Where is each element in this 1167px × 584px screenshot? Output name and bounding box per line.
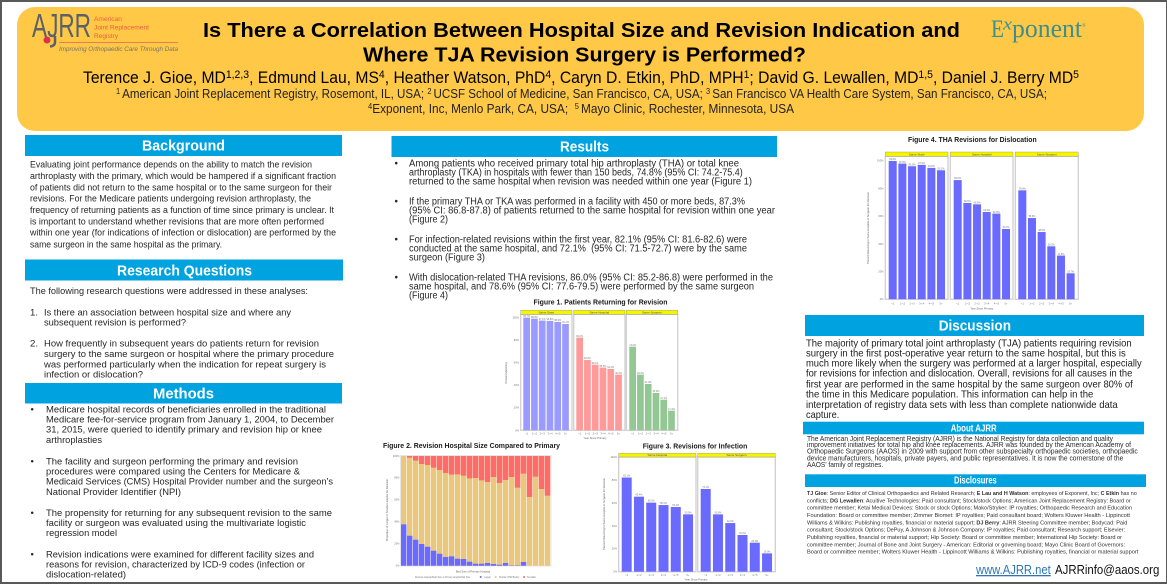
chart: figure 3 revisions for infection: 40% xyxy=(612,524,618,528)
panel: research questions xyxy=(25,260,343,380)
chart: figure 1 patients returning for revision: Year Since Primary xyxy=(584,436,607,440)
chart: figure 1 patients returning for revision: <1 xyxy=(578,432,582,436)
affiliations: 4 xyxy=(368,102,373,111)
text block: background: arthroplasty with the primary, which would be hampered if a significant fraction xyxy=(30,171,336,182)
chart: figure 1 patients returning for revision: 94.1% xyxy=(562,321,570,324)
text block: methods: Medicaid Services (CMS) Hospital Provider number and the surgeon’s xyxy=(46,477,333,488)
text block: background xyxy=(29,160,336,250)
chart: figure 1 patients returning for revision: 5+ xyxy=(564,432,567,436)
chart: figure 1 patients returning for revision: 95.9% xyxy=(554,319,562,322)
chart: figure 1 patients returning for revision: 97.1% xyxy=(539,318,546,321)
text block: disclosures: conflicts; DG Lewallen: Acuitive Technologies: Paid consultant; Stock/stock Options; American Joint Replacement Registry: Board or xyxy=(807,498,1131,504)
chart: figure 1 patients returning for revision: 20% xyxy=(514,406,520,410)
chart: figure 4 THA revisions for dislocation: 2-<3 xyxy=(1039,302,1045,306)
chart: figure 1 patients returning for revision: 17.4% xyxy=(668,408,676,411)
chart: figure 1 patients returning for revision: Same Surgeon xyxy=(642,310,662,314)
chart: figure 4 THA revisions for dislocation: 20% xyxy=(878,270,884,274)
authors: , Daniel J. Berry MD xyxy=(933,69,1073,87)
title: Is There a Correlation Between Hospital Size and Revision Indication and xyxy=(203,19,960,42)
heading: research questions: Research Questions xyxy=(117,263,252,280)
logo: AJRR: Registry xyxy=(94,33,119,40)
chart: figure 3 revisions for infection: 82.1% xyxy=(623,475,631,478)
header banner xyxy=(17,7,1144,131)
affiliations: Mayo Clinic, Rochester, Minnesota, USA xyxy=(581,102,795,116)
text block: disclosures: Board or committee member; Wolters Kluwer Health - Lippincott Williams & Wilkins: Publishing royalties, financial or material support xyxy=(807,550,1139,556)
text block: results: Among patients who received primary total hip arthroplasty (THA) or total knee xyxy=(409,159,740,170)
text block: methods: Medicare fee-for-service program from January 1, 2004, to December xyxy=(46,414,335,425)
text block: background: revisions. For the Medicare patients undergoing revision arthroplasty, the xyxy=(30,194,311,205)
text block: research questions: 2. xyxy=(30,339,38,350)
text block: discussion: The majority of primary total joint arthroplasty (TJA) patients requiring revision xyxy=(806,339,1132,350)
chart: figure 1 patients returning for revision: Figure 1. Patients Returning for Revision xyxy=(534,297,668,306)
chart: figure 3 revisions for infection: 100% xyxy=(610,455,618,459)
chart: figure 2 revision hospital size compared to primary: Smaller xyxy=(527,575,536,579)
text block: methods: • xyxy=(30,550,34,561)
heading: background: Background xyxy=(142,138,225,155)
panel: methods xyxy=(25,383,342,581)
chart: figure 4 THA revisions for dislocation: <1 xyxy=(891,302,895,306)
chart: figure 1 patients returning for revision: 4-<5 xyxy=(661,432,667,436)
heading: results: Results xyxy=(560,139,609,156)
text block: disclosures: Foundation: Board or committee member; Zimmer Biomet: IP royalties; Paid consultant board; Wolters Kluwer Health - Lippincott xyxy=(807,513,1130,519)
text block: about AJRR: AAOS’ family of registries. xyxy=(807,460,883,469)
text block: methods: dislocation-related) xyxy=(46,570,126,581)
chart: figure 3 revisions for infection: 16.0% xyxy=(764,551,771,554)
text block: methods: • xyxy=(30,404,34,415)
text block: methods: The facility and surgeon performing the primary and revision xyxy=(46,456,298,467)
heading: background xyxy=(25,135,342,156)
chart: figure 1 patients returning for revision: 1-<2 xyxy=(638,432,644,436)
chart: figure 1 patients returning for revision: 62.2% xyxy=(584,357,592,360)
affiliations: UCSF School of Medicine, San Francisco, CA, USA; xyxy=(434,87,706,101)
text block: methods xyxy=(30,404,335,581)
chart: figure 2 revision hospital size compared to primary: Larger xyxy=(484,575,491,579)
chart: figure 4 THA revisions for dislocation: 78.6% xyxy=(1019,187,1027,190)
affiliations: San Francisco VA Health Care System, San Francisco, CA, USA; xyxy=(712,87,1047,101)
chart: figure 2 revision hospital size compared to primary xyxy=(383,441,561,579)
heading: disclosures: Disclosures xyxy=(954,476,997,487)
chart: figure 4 THA revisions for dislocation: Percent Returning to Same Hospital or Surgeon for Revision xyxy=(866,192,870,264)
chart: figure 3 revisions for infection: 72.1% xyxy=(702,486,710,489)
chart: figure 2 revision hospital size compared to primary: 20% xyxy=(394,542,400,546)
panel: disclosures xyxy=(805,474,1146,556)
chart: figure 4 THA revisions for dislocation: 100% xyxy=(877,159,884,163)
text block: results: If the primary THA or TKA was performed in a facility with 450 or more beds, 87.3% xyxy=(409,197,745,208)
heading: discussion xyxy=(805,315,1144,336)
chart: figure 4 THA revisions for dislocation: 40% xyxy=(878,242,884,246)
chart: figure 4 THA revisions for dislocation: Figure 4. THA Revisions for Dislocation xyxy=(908,135,1037,144)
chart: figure 4 THA revisions for dislocation: 63.0% xyxy=(983,209,991,212)
chart: figure 1 patients returning for revision: Same State xyxy=(538,310,554,314)
authors: , Caryn D. Etkin, PhD, MPH xyxy=(551,69,744,87)
chart: figure 1 patients returning for revision: 2-<3 xyxy=(646,432,651,436)
chart: figure 4 THA revisions for dislocation: 3-<4 xyxy=(919,302,925,306)
text block: about AJRR xyxy=(807,434,1138,469)
chart: figure 4 THA revisions for dislocation: 69.5% xyxy=(964,200,972,203)
affiliations xyxy=(116,87,1047,116)
chart: figure 1 patients returning for revision: 3-<4 xyxy=(653,432,659,436)
chart: figure 3 revisions for infection: Same Hospital xyxy=(648,453,667,457)
chart: figure 3 revisions for infection: 4-<5 xyxy=(752,573,758,577)
chart: figure 4 THA revisions for dislocation: 97.0% xyxy=(918,162,926,165)
text block: research questions xyxy=(30,286,334,380)
chart: figure 1 patients returning for revision: 58.1% xyxy=(592,362,599,365)
chart: figure 1 patients returning for revision: 2-<3 xyxy=(540,432,545,436)
chart: figure 4 THA revisions for dislocation: 1-<2 xyxy=(965,302,971,306)
chart: figure 3 revisions for infection: 3-<4 xyxy=(661,573,667,577)
logo: AJRR: Joint Replacement xyxy=(94,24,149,32)
chart: figure 4 THA revisions for dislocation: 5+ xyxy=(1069,302,1073,306)
chart: figure 1 patients returning for revision xyxy=(504,297,678,440)
text block: methods: Medicare hospital records of beneficiaries enrolled in the traditional xyxy=(46,404,326,415)
chart: figure 4 THA revisions for dislocation: 96.0% xyxy=(909,163,916,166)
chart: figure 1 patients returning for revision: 33.0% xyxy=(653,390,660,393)
text block: results: surgeon (Figure 3) xyxy=(409,253,485,264)
chart: figure 1 patients returning for revision: 4-<5 xyxy=(555,432,561,436)
chart: figure 3 revisions for infection: 50.0% xyxy=(715,511,722,514)
affiliations: 3 xyxy=(706,87,712,96)
chart: figure 4 THA revisions for dislocation: 4-<5 xyxy=(1058,302,1064,306)
text block: research questions: Is there an association between hospital size and where any xyxy=(44,308,291,319)
text block: discussion xyxy=(806,339,1143,421)
chart: figure 3 revisions for infection: 56.4% xyxy=(672,504,680,507)
text block: discussion: the time in this Medicare population. This information can help in the xyxy=(806,390,1094,401)
chart: figure 2 revision hospital size compared to primary: Proportion of Larger or Smaller Hospital for Revision xyxy=(385,478,389,541)
chart: figure 4 THA revisions for dislocation: 94.8% xyxy=(928,165,936,168)
logo: Exponent: ponent xyxy=(1012,14,1083,43)
chart: figure 2 revision hospital size compared to primary: 80% xyxy=(394,476,400,480)
text block: research questions: How frequently in subsequent years do patients return for revision xyxy=(44,339,319,350)
text block: results: (Figure 2) xyxy=(409,215,448,226)
chart: figure 4 THA revisions for dislocation: 5+ xyxy=(940,302,943,306)
text block: results: • xyxy=(394,197,398,208)
text block: disclosures: consultant; Stock/stock Options; DePuy, A Johnson & Johnson Company: IP royalties; Paid consultant; Research support; Elsevier: xyxy=(807,528,1125,534)
chart: figure 1 patients returning for revision: Same Hospital xyxy=(590,310,609,314)
logo: AJRR: American xyxy=(94,16,122,23)
text block: methods: The propensity for returning for any subsequent revision to the same xyxy=(46,508,332,519)
text block: disclosures: committee member; Ketai Medical Devices: Stock or stock Options; Mako/Stryker: IP royalties; Orthopaedic Research and Education xyxy=(807,506,1132,512)
chart: figure 1 patients returning for revision: 74.0% xyxy=(629,344,637,347)
chart: figure 3 revisions for infection: 0% xyxy=(613,570,618,574)
text block: results: same hospital, and 78.6% (95% CI: 77.6-79.5) were performed by the same surgeon xyxy=(409,281,754,292)
chart: figure 2 revision hospital size compared to primary: Figure 2. Revision Hospital Size Compared to Primary xyxy=(383,441,561,450)
heading: about AJRR xyxy=(803,422,1144,434)
text block: disclosures xyxy=(807,491,1139,556)
footer contact links: www.AJRR.net xyxy=(975,562,1051,577)
text block: disclosures: Publishing royalties, financial or material support; Hip Society: Board or committee member; International Hip Society: Board or xyxy=(807,535,1122,541)
text block: background: within one year (for indications of infection or dislocation) are performed by the xyxy=(29,228,336,239)
text block: methods: 31, 2015, were queried to identify primary and revision hip or knee xyxy=(46,425,322,436)
chart: figure 3 revisions for infection: 50.0% xyxy=(685,511,692,514)
heading: research questions xyxy=(25,260,343,280)
text block: methods: National Provider Identifier (NPI) xyxy=(46,487,181,498)
chart: figure 1 patients returning for revision: 0% xyxy=(515,428,520,432)
chart: figure 1 patients returning for revision: 60% xyxy=(514,360,520,364)
affiliations: American Joint Replacement Registry, Rosemont, IL, USA; xyxy=(122,87,427,101)
chart: figure 3 revisions for infection: 32.0% xyxy=(739,532,747,535)
chart: figure 1 patients returning for revision: 5+ xyxy=(670,432,673,436)
heading: about AJRR: About AJRR xyxy=(951,423,997,434)
text block: discussion: interpretation of registry data sets with less than complete nationwide data xyxy=(806,400,1118,411)
chart: figure 1 patients returning for revision: 1-<2 xyxy=(585,432,591,436)
text block: about AJRR: device manufacturers, hospitals, private payers, and public representatives. It is now the cornerstone of the xyxy=(807,453,1123,462)
affiliations: 5 xyxy=(575,102,581,111)
chart: figure 2 revision hospital size compared to primary: Revision Hospital Beds Size vs Primary Hospital Bed Size xyxy=(415,575,470,579)
authors: , Heather Watson, PhD xyxy=(385,69,545,87)
chart: figure 1 patients returning for revision: 27.1% xyxy=(660,397,668,400)
chart: figure 3 revisions for infection: <1 xyxy=(625,573,629,577)
chart: figure 4 THA revisions for dislocation: 3-<4 xyxy=(984,302,990,306)
chart: figure 3 revisions for infection: 80% xyxy=(612,478,618,482)
chart: figure 3 revisions for infection: 1-<2 xyxy=(715,573,721,577)
text block: results: (Figure 4) xyxy=(409,290,448,301)
chart: figure 1 patients returning for revision: 4-<5 xyxy=(608,432,614,436)
chart: figure 4 THA revisions for dislocation: 1-<2 xyxy=(1029,302,1035,306)
chart: figure 3 revisions for infection: 2-<3 xyxy=(649,573,654,577)
text block: results: returned to the same hospital when revision was needed within one year (Figure 1) xyxy=(409,176,752,188)
chart: figure 3 revisions for infection: Same Surgeon xyxy=(726,453,747,457)
text block: research questions: infection or dislocation? xyxy=(44,369,143,380)
chart: figure 1 patients returning for revision: 40% xyxy=(514,383,520,387)
logo: Exponent: E xyxy=(991,16,1004,43)
panel: discussion xyxy=(805,315,1144,421)
text block: discussion: for revisions for infection and dislocation. Overall, revisions for all causes in the xyxy=(806,369,1133,380)
footer contact links xyxy=(975,562,1159,577)
text block: methods: • xyxy=(30,508,34,519)
chart: figure 3 revisions for infection: 3-<4 xyxy=(740,573,746,577)
authors: , Edmund Lau, MS xyxy=(249,69,379,87)
heading: methods: Methods xyxy=(153,385,214,402)
chart: figure 3 revisions for infection xyxy=(602,442,775,582)
chart: figure 3 revisions for infection: 60.2% xyxy=(648,500,656,503)
text block: about AJRR: Orthopaedic Surgeons (AAOS) in 2009 with support from other subspecialty orthopaedic societies, orthopaedic xyxy=(807,446,1138,456)
chart: figure 1 patients returning for revision: 41.0% xyxy=(645,381,652,384)
chart: figure 4 THA revisions for dislocation: 61.8% xyxy=(993,211,1001,214)
affiliations: Exponent, Inc, Menlo Park, CA, USA; xyxy=(372,102,575,116)
chart: figure 4 THA revisions for dislocation: 31.5% xyxy=(1058,253,1065,256)
chart: figure 1 patients returning for revision: 99.7% xyxy=(523,315,531,318)
text block: methods: • xyxy=(30,456,34,467)
chart: figure 3 revisions for infection: 58.1% xyxy=(660,502,668,505)
chart: figure 4 THA revisions for dislocation: 48.5% xyxy=(1038,229,1046,232)
text block: discussion: capture. xyxy=(806,410,839,421)
text block: background: frequency of returning patients as a function of time since primary is unclear. It xyxy=(30,205,334,216)
chart: figure 1 patients returning for revision: 55.5% xyxy=(600,365,607,368)
chart: figure 2 revision hospital size compared to primary: 40% xyxy=(394,520,400,524)
text block: research questions: The following research questions were addressed in these analyses: xyxy=(30,286,308,297)
chart: figure 3 revisions for infection: 42.4% xyxy=(727,520,735,523)
chart: figure 1 patients returning for revision: Percent Matching xyxy=(504,362,508,383)
chart: figure 3 revisions for infection: <1 xyxy=(704,573,708,577)
text block: background: same surgeon in the same hospital as the primary. xyxy=(30,239,222,250)
chart: figure 3 revisions for infection: 20% xyxy=(612,547,618,551)
chart: figure 3 revisions for infection: Percent Returning to Same Hospital or Surgeon for Revision xyxy=(602,478,606,550)
text block: about AJRR: improvement initiatives for total hip and knee replacements. AJRR was founded by the American Academy of xyxy=(807,440,1131,449)
heading: discussion: Discussion xyxy=(939,318,1011,335)
chart: figure 3 revisions for infection: 60% xyxy=(612,501,618,505)
authors: ; David G. Lewallen, MD xyxy=(749,69,918,87)
text block: methods: facility or surgeon was evaluated using the multivariate logistic xyxy=(46,518,306,529)
text block: methods: reasons for revision, characterized by ICD-9 codes (infection or xyxy=(46,560,306,571)
authors: 4 xyxy=(545,69,551,81)
chart: figure 3 revisions for infection: Year Since Primary xyxy=(685,578,708,582)
chart: figure 1 patients returning for revision: 3-<4 xyxy=(547,432,553,436)
chart: figure 4 THA revisions for dislocation: 3-<4 xyxy=(1049,302,1054,306)
text block: disclosures: TJ Gioe: Senior Editor of Clinical Orthopaedics and Related Research; E Lau and H Watson: employees of Exponent, Inc; C Etkin has no xyxy=(807,491,1137,497)
chart: figure 4 THA revisions for dislocation: 0% xyxy=(880,297,884,301)
chart: figure 4 THA revisions for dislocation: 99.8% xyxy=(889,158,897,161)
text block: results: (95% CI: 86.8-87.8) of patients returned to the same hospital for revision within one year xyxy=(409,206,776,217)
text block: methods: regression model xyxy=(46,528,117,539)
text block: research questions: was performed particularly when the indication for repeat surgery is xyxy=(43,359,326,370)
text block: results: conducted at the same hospital, and 72.1% (95% CI: 71.5-72.7) were by the same xyxy=(409,244,748,255)
chart: figure 4 THA revisions for dislocation: Same Surgeon xyxy=(1037,152,1057,156)
text block: research questions: subsequent revision is performed? xyxy=(44,318,186,329)
text block: results: For infection-related revisions within the first year, 82.1% (95% CI: 81.6-82.6) were xyxy=(409,235,748,246)
affiliations: 2 xyxy=(427,87,434,96)
text block: background: of patients did not return to the same hospital or to the same surgeon for their xyxy=(30,182,333,193)
chart: figure 1 patients returning for revision: 49.3% xyxy=(615,372,623,375)
chart: figure 4 THA revisions for dislocation: 5+ xyxy=(1005,302,1008,306)
chart: figure 4 THA revisions for dislocation: 50.7% xyxy=(1003,226,1010,229)
chart: figure 3 revisions for infection: 4-<5 xyxy=(673,573,679,577)
logo: Exponent: ® xyxy=(1082,23,1086,29)
chart: figure 4 THA revisions for dislocation: 97.9% xyxy=(899,161,907,164)
chart: figure 1 patients returning for revision: 98.8% xyxy=(531,316,539,319)
chart: figure 4 THA revisions for dislocation: 68.5% xyxy=(974,202,981,205)
authors: 5 xyxy=(1073,69,1079,81)
text block: disclosures: Williams & Wilkins: Publishing royalties, financial or material support; DJ Berry: AJRR Steering Committee member; Bodycad: Paid xyxy=(807,520,1127,526)
panel: results xyxy=(392,136,777,301)
chart: figure 4 THA revisions for dislocation: Same State xyxy=(909,152,925,156)
chart: figure 4 THA revisions for dislocation: 1-<2 xyxy=(900,302,906,306)
chart: figure 1 patients returning for revision: 82.0% xyxy=(576,335,584,338)
chart: figure 4 THA revisions for dislocation: Year Since Primary xyxy=(970,306,994,310)
text block: methods: Revision indications were examined for different facility sizes and xyxy=(46,550,314,561)
text block: discussion: surgery in the first post-operative year return to the same hospital, but this is xyxy=(806,349,1126,360)
text block: background: Evaluating joint performance depends on the ability to match the revision xyxy=(30,160,312,171)
heading: results xyxy=(392,136,777,157)
chart: figure 3 revisions for infection: 25.3% xyxy=(751,540,759,543)
chart: figure 1 patients returning for revision: 1-<2 xyxy=(532,432,538,436)
authors: 1,5 xyxy=(918,69,933,81)
logo: Exponent: x xyxy=(1002,14,1013,34)
logo: AJRR xyxy=(32,7,179,53)
chart: figure 4 THA revisions for dislocation: 86.0% xyxy=(954,177,962,180)
chart: figure 1 patients returning for revision: 49.3% xyxy=(637,372,645,375)
chart: figure 4 THA revisions for dislocation: 60% xyxy=(878,214,884,218)
chart: figure 3 revisions for infection: 5+ xyxy=(687,573,690,577)
chart: figure 4 THA revisions for dislocation: 2-<3 xyxy=(909,302,915,306)
chart: figure 1 patients returning for revision: 96.8% xyxy=(547,318,554,321)
chart: figure 2 revision hospital size compared to primary: 100% xyxy=(393,454,400,458)
chart: figure 4 THA revisions for dislocation: 58.6% xyxy=(1029,215,1036,218)
authors: Terence J. Gioe, MD xyxy=(83,69,233,87)
text block: methods: procedures were compared using the Centers for Medicare & xyxy=(46,466,301,477)
text block: about AJRR: The American Joint Replacement Registry (AJRR) is the National Registry for data collection and quality xyxy=(807,434,1113,443)
text block: research questions: surgery to the same surgeon or hospital where the primary procedure xyxy=(44,349,334,360)
text block: discussion: much more likely when the surgery was performed at a larger hospital, especially xyxy=(806,359,1143,370)
chart: figure 3 revisions for infection: 2-<3 xyxy=(728,573,733,577)
chart: figure 1 patients returning for revision: 100% xyxy=(512,315,520,319)
text block: disclosures: committee member; Journal of Bone and Joint Surgery - American: Editorial or governing board; Mayo Clinic Board of Governors: xyxy=(807,542,1125,548)
logo: AJRR: AJRR xyxy=(32,7,91,44)
chart: figure 4 THA revisions for dislocation: 18.7% xyxy=(1067,271,1075,274)
logo: AJRR: Improving Orthopaedic Care Through Data xyxy=(59,47,179,53)
chart: figure 3 revisions for infection: 65.4% xyxy=(636,494,643,497)
chart: figure 1 patients returning for revision: 2-<3 xyxy=(593,432,598,436)
chart: figure 2 revision hospital size compared to primary: Bed Size of Primary Hospital xyxy=(456,570,490,574)
text block: background: is important to understand whether revisions that are more often performed xyxy=(30,216,324,227)
chart: figure 4 THA revisions for dislocation: 4-<5 xyxy=(994,302,1000,306)
chart: figure 4 THA revisions for dislocation: 2-<3 xyxy=(974,302,980,306)
chart: figure 4 THA revisions for dislocation xyxy=(866,135,1078,310)
chart: figure 1 patients returning for revision: 54.3% xyxy=(607,366,615,369)
chart: figure 3 revisions for infection: 1-<2 xyxy=(636,573,642,577)
panel: about AJRR xyxy=(803,422,1144,469)
text block: methods: arthroplasties xyxy=(46,435,102,446)
text block: results: • xyxy=(394,235,398,246)
text block: results: arthroplasty (TKA) in hospitals with fewer than 150 beds, 74.8% (95% CI: 74.2-75.4) xyxy=(409,168,743,179)
text block: results: • xyxy=(394,159,398,170)
text block: research questions: 1. xyxy=(30,308,38,319)
text block: results xyxy=(394,159,776,301)
chart: figure 2 revision hospital size compared to primary: Similar (±50 Beds) xyxy=(499,575,519,579)
authors: 4 xyxy=(379,69,385,81)
chart: figure 3 revisions for infection: Figure 3. Revisions for Infection xyxy=(643,442,748,451)
title xyxy=(203,19,960,66)
chart: figure 4 THA revisions for dislocation: <1 xyxy=(1021,302,1024,306)
panel: background xyxy=(25,135,342,250)
chart: figure 4 THA revisions for dislocation: 4-<5 xyxy=(929,302,935,306)
heading: methods xyxy=(25,383,342,404)
affiliations: 1 xyxy=(116,87,122,96)
chart: figure 1 patients returning for revision: <1 xyxy=(525,432,529,436)
chart: figure 2 revision hospital size compared to primary: 0% xyxy=(396,564,400,568)
text block: results: • xyxy=(394,272,398,283)
chart: figure 1 patients returning for revision: 80% xyxy=(514,338,520,342)
chart: figure 4 THA revisions for dislocation: Same Hospital xyxy=(972,152,992,156)
chart: figure 1 patients returning for revision: <1 xyxy=(631,432,635,436)
chart: figure 4 THA revisions for dislocation: 38.2% xyxy=(1048,244,1056,247)
chart: figure 4 THA revisions for dislocation: 80% xyxy=(878,186,884,190)
authors: 1,2,3 xyxy=(226,69,249,81)
chart: figure 3 revisions for infection: 5+ xyxy=(766,573,769,577)
heading: disclosures xyxy=(805,474,1146,487)
chart: figure 4 THA revisions for dislocation: 93.1% xyxy=(938,168,945,171)
chart: figure 1 patients returning for revision: 5+ xyxy=(617,432,620,436)
title: Where TJA Revision Surgery is Performed? xyxy=(363,44,806,66)
chart: figure 2 revision hospital size compared to primary: 60% xyxy=(394,498,400,502)
authors: 1 xyxy=(744,69,749,81)
text block: results: With dislocation-related THA revisions, 86.0% (95% CI: 85.2-86.8) were performed in the xyxy=(409,272,774,283)
text block: discussion: first year are performed in the same hospital by the same surgeon over 80% of xyxy=(806,379,1133,390)
chart: figure 4 THA revisions for dislocation: <1 xyxy=(956,302,960,306)
chart: figure 1 patients returning for revision: 3-<4 xyxy=(600,432,606,436)
